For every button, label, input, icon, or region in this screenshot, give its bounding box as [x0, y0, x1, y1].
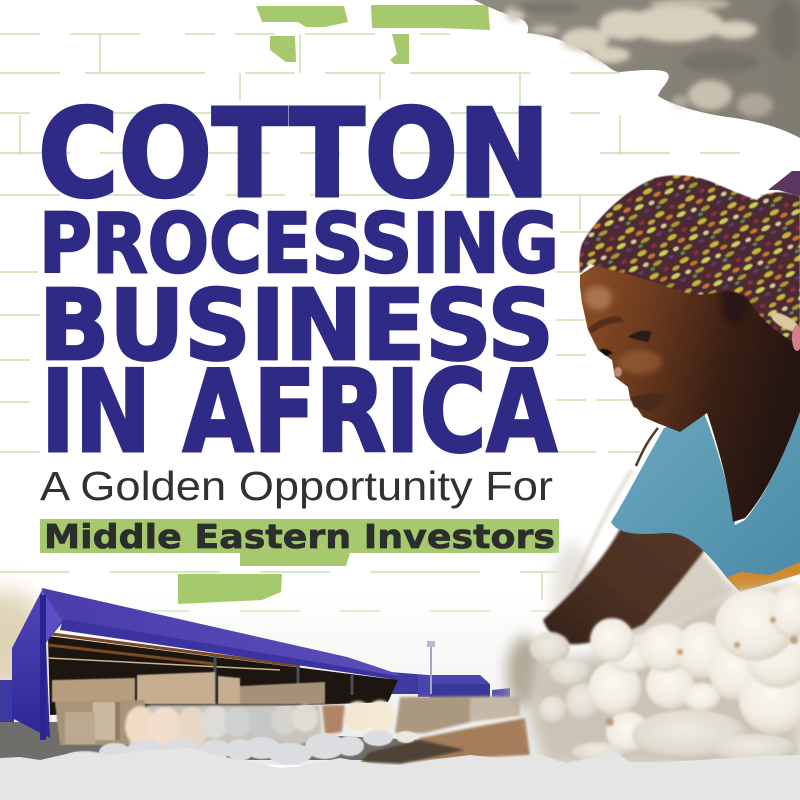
title line: PROCESSING: PROCESSING [39, 197, 559, 292]
torn paper bottom band [0, 748, 800, 800]
cloudy sky corner [474, 0, 800, 138]
title line: BUSINESS: BUSINESS [39, 269, 554, 382]
cotton bales row [125, 696, 520, 750]
warehouse roof and wall [42, 588, 398, 680]
hazy cotton and wall behind arm [507, 542, 735, 708]
loose cotton on ground [65, 730, 416, 765]
green paint patches [178, 5, 490, 604]
bales in shed [52, 672, 325, 745]
collar strap [636, 428, 658, 466]
neck and face [580, 262, 800, 522]
headscarf knot band [768, 309, 800, 335]
warehouse interior [48, 636, 398, 715]
woman worker [543, 171, 800, 644]
subtitle: A Golden Opportunity For [40, 463, 553, 509]
title line: COTTON: COTTON [38, 84, 550, 225]
forearm [543, 518, 706, 644]
ground [0, 722, 420, 760]
earring pink [792, 325, 800, 351]
foreground cotton bolls [530, 585, 800, 765]
title [38, 84, 559, 478]
headscarf [579, 175, 800, 345]
highlighted tagline: Middle Eastern Investors [44, 517, 555, 556]
face highlights and features [584, 280, 749, 374]
roof glimpse behind head [768, 171, 800, 196]
shirt [611, 412, 800, 592]
distant buildings [0, 680, 14, 722]
warehouse photo [0, 588, 530, 765]
title line: IN AFRICA: IN AFRICA [41, 346, 557, 478]
